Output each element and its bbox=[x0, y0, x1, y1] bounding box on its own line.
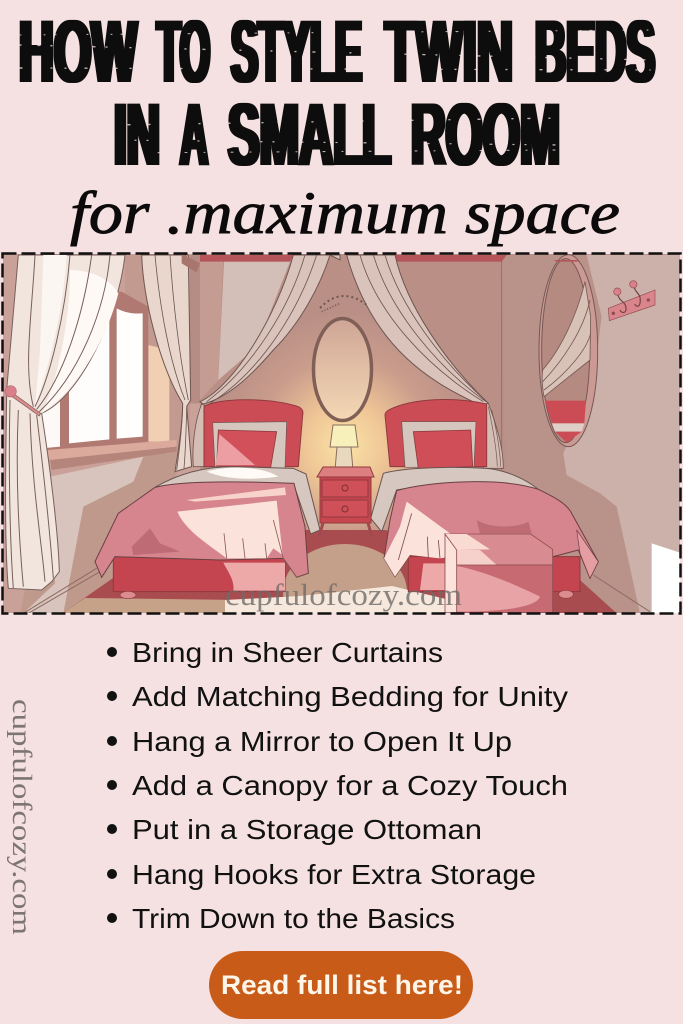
oval wall mirror bbox=[539, 255, 598, 447]
right bed headboard and pillow bbox=[385, 400, 487, 468]
crown moulding bbox=[395, 255, 507, 262]
back wall with lamp glow bbox=[200, 254, 505, 530]
left wall bbox=[0, 250, 200, 613]
call to action button bbox=[209, 951, 473, 1019]
bed base bbox=[113, 557, 285, 592]
sheet bbox=[155, 467, 320, 534]
title: A bbox=[180, 84, 208, 184]
left curtain bbox=[5, 255, 125, 590]
skirting bbox=[593, 575, 650, 612]
left canopy drape bbox=[193, 255, 340, 467]
right canopy drape bbox=[347, 255, 503, 468]
watermark: cupfulofcozy.com bbox=[225, 577, 462, 612]
tip 5: Put in a Storage Ottoman bbox=[132, 814, 482, 845]
side watermark: cupfulofcozy.com bbox=[7, 699, 37, 935]
call to action button: Read full list here! bbox=[221, 970, 463, 1000]
title: TWIN bbox=[385, 1, 513, 101]
pillow bbox=[213, 422, 287, 468]
lit wall area bbox=[563, 255, 683, 613]
subtitle: for .maximum space bbox=[70, 180, 620, 246]
dashed border bbox=[2, 254, 680, 614]
bed base bbox=[408, 557, 580, 592]
oval mirror above nightstand bbox=[314, 296, 372, 420]
duvet bbox=[384, 482, 598, 578]
tip 6: Hang Hooks for Extra Storage bbox=[132, 859, 536, 890]
wall hooks bbox=[608, 281, 655, 321]
title: STYLE bbox=[231, 1, 362, 101]
left side walls, window and curtains bbox=[0, 250, 340, 613]
right bed bedding bbox=[371, 467, 598, 598]
tip 7: Trim Down to the Basics bbox=[132, 903, 455, 934]
small gold trim string bbox=[322, 303, 340, 312]
left bed bbox=[95, 400, 320, 599]
skirting bbox=[23, 568, 100, 613]
bedside lamp bbox=[330, 425, 358, 470]
tip 4: Add a Canopy for a Cozy Touch bbox=[132, 770, 568, 801]
nightstand bbox=[317, 467, 374, 537]
sheet bbox=[371, 467, 538, 532]
storage ottoman bbox=[445, 534, 553, 613]
crown moulding bbox=[200, 255, 293, 262]
bedroom illustration bbox=[0, 250, 683, 640]
title: ROOM bbox=[411, 84, 560, 184]
duvet bbox=[95, 482, 308, 577]
right wall bbox=[580, 563, 620, 613]
title: SMALL bbox=[228, 84, 391, 184]
tip 1: Bring in Sheer Curtains bbox=[132, 637, 443, 668]
right side of room bbox=[347, 253, 683, 613]
wall corner line bbox=[501, 262, 502, 470]
title bbox=[19, 1, 655, 184]
floor and rug bbox=[64, 530, 616, 613]
window bbox=[40, 292, 177, 470]
headboard bbox=[204, 400, 303, 467]
title: TO bbox=[157, 1, 210, 101]
title: HOW bbox=[19, 1, 137, 101]
tips list bbox=[107, 637, 568, 934]
tip 3: Hang a Mirror to Open It Up bbox=[132, 726, 512, 757]
right window curtain bbox=[142, 255, 192, 472]
title: IN bbox=[114, 84, 160, 184]
tip 2: Add Matching Bedding for Unity bbox=[132, 681, 568, 712]
